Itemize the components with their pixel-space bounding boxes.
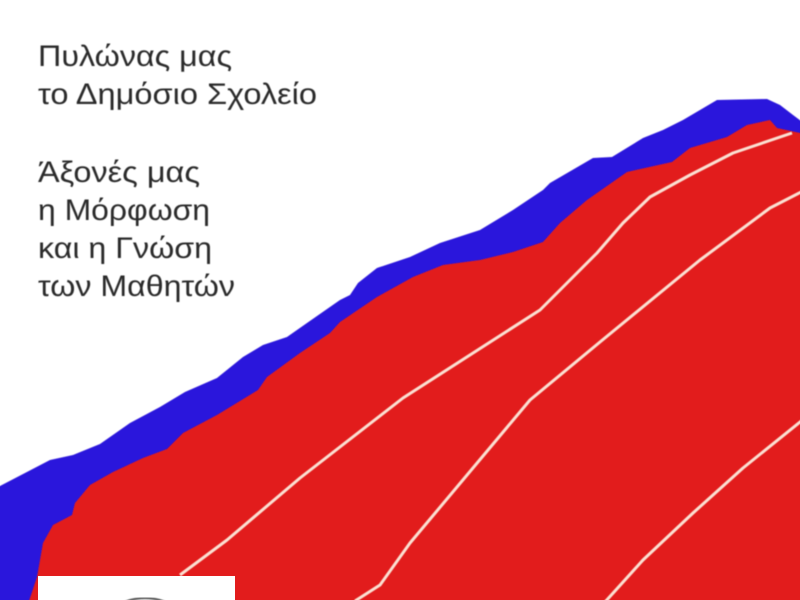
- mountain path lines: [180, 133, 800, 600]
- text block: axes text: [38, 156, 235, 303]
- heading: pillar text: το Δημόσιο Σχολείο: [38, 78, 317, 111]
- logo arc: [125, 598, 165, 600]
- mountain: red body: [26, 120, 800, 600]
- heading: pillar text: Πυλώνας μας: [38, 40, 232, 73]
- white logo box: [38, 576, 235, 600]
- heading: pillar text: [38, 40, 317, 111]
- text block: axes text: και η Γνώση: [38, 232, 212, 265]
- text block: axes text: των Μαθητών: [38, 270, 235, 303]
- text block: axes text: Άξονές μας: [38, 156, 200, 189]
- text block: axes text: η Μόρφωση: [38, 194, 210, 227]
